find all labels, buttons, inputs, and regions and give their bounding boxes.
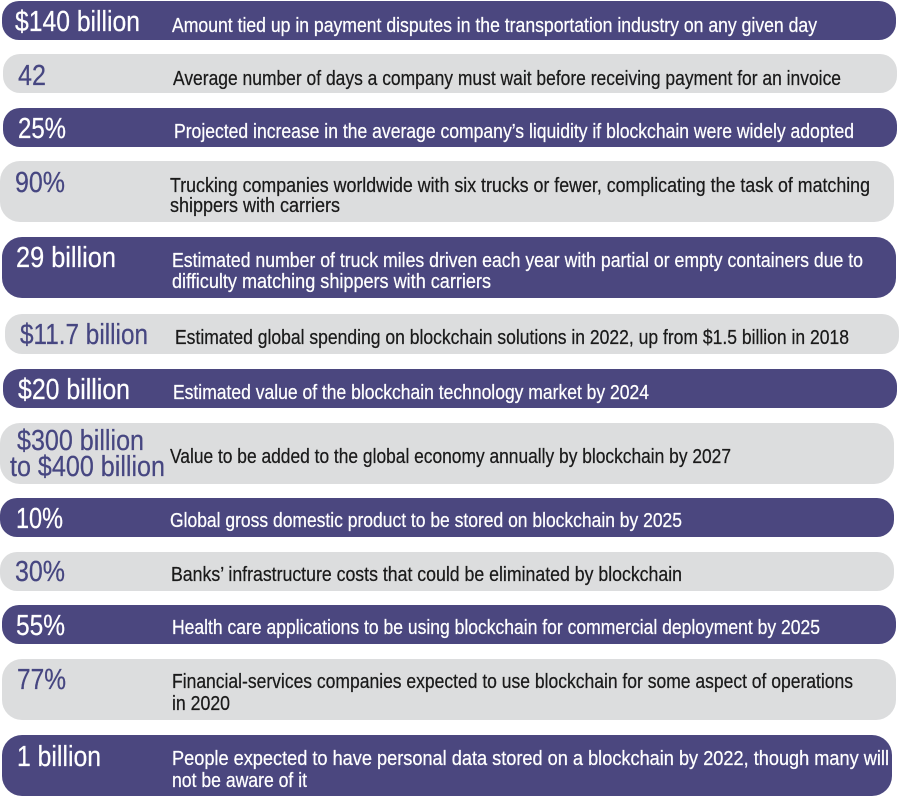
row: 29 billion: difficulty matching shippers with carriers — [172, 271, 491, 293]
row: $11.7 billion — [5, 314, 899, 354]
row: 30% — [0, 552, 894, 591]
row: 77%: 77% — [17, 664, 66, 696]
row: $20 billion: $20 billion — [18, 374, 130, 406]
row: 29 billion — [2, 237, 896, 298]
row: 29 billion: 29 billion — [16, 242, 116, 274]
row: $11.7 billion: $11.7 billion — [20, 319, 148, 351]
row: $300 billion to $400 billion: Value to be added to the global economy annually by blockchain by 2027 — [170, 446, 731, 468]
row: $140 billion — [2, 1, 896, 40]
row: 42: 42 — [18, 60, 46, 92]
row: 1 billion — [2, 735, 892, 796]
row: 30%: Banks’ infrastructure costs that could be eliminated by blockchain — [171, 564, 682, 586]
row: 55%: 55% — [16, 610, 65, 642]
row: $140 billion: Amount tied up in payment disputes in the transportation industry on any given day — [172, 15, 817, 37]
row: 30%: 30% — [15, 556, 65, 588]
row: 90% — [0, 161, 894, 222]
row: $140 billion: $140 billion — [15, 6, 140, 38]
row: 10% — [0, 498, 894, 537]
row: 42 — [3, 54, 897, 93]
row: 1 billion: 1 billion — [17, 741, 101, 773]
row: $20 billion — [3, 369, 897, 408]
row: 77% — [2, 659, 896, 720]
row: 25%: 25% — [18, 113, 66, 145]
row: 10%: 10% — [16, 503, 63, 535]
row: 10%: Global gross domestic product to be stored on blockchain by 2025 — [170, 510, 682, 532]
row: 90%: shippers with carriers — [170, 195, 340, 217]
row: 55% — [2, 605, 896, 644]
row: $300 billion to $400 billion: $300 billion — [17, 425, 144, 457]
row: 1 billion: not be aware of it — [172, 770, 307, 792]
row: 55%: Health care applications to be using blockchain for commercial deployment by 2025 — [172, 617, 820, 639]
row: 25% — [3, 108, 897, 147]
row: $300 billion to $400 billion — [0, 423, 894, 484]
row: $20 billion: Estimated value of the blockchain technology market by 2024 — [173, 382, 649, 404]
row: $300 billion to $400 billion: to $400 billion — [10, 451, 165, 483]
row: 90%: 90% — [15, 167, 65, 199]
row: 77%: in 2020 — [172, 693, 230, 715]
